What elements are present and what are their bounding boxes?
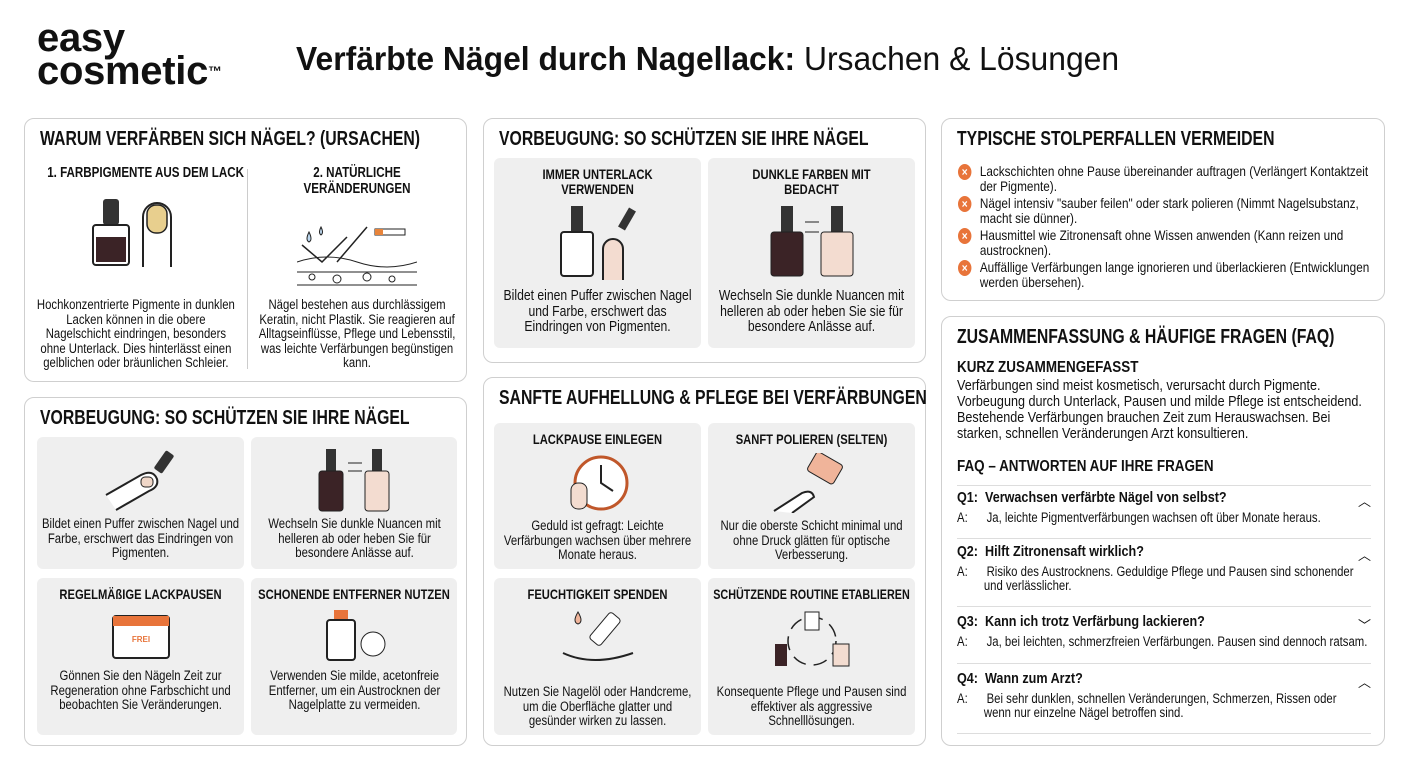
card: polish: SANFT POLIEREN (SELTEN) <box>736 431 887 447</box>
card: base coat: IMMER UNTERLACK <box>542 166 653 182</box>
panel: summary & FAQ: ZUSAMMENFASSUNG & HÄUFIGE FRAGEN (FAQ) <box>957 326 1334 348</box>
card: base coat: Bildet einen Puffer zwischen Nagel und Farbe, erschwert das Eindringen von Pigmenten. <box>504 288 692 335</box>
card: polish: Nur die oberste Schicht minimal und ohne Druck glätten für optische Verbesserung. <box>720 518 903 562</box>
card: routine: SCHÜTZENDE ROUTINE ETABLIEREN <box>713 587 910 602</box>
card: remover: SCHONENDE ENTFERNER NUTZEN <box>258 586 450 602</box>
card: base coat: VERWENDEN <box>561 181 634 197</box>
FAQ list: ︿ <box>1358 548 1371 563</box>
Q2: A: Risiko des Austrocknens. Geduldige Pflege und Pausen sind schonender und verlässlicher. <box>957 564 1354 593</box>
card: dark colours: DUNKLE FARBEN MIT <box>752 166 871 182</box>
FAQ list: ︿ <box>1358 494 1371 509</box>
card: moisture <box>494 578 701 735</box>
card: dark colours: Wechseln Sie dunkle Nuancen mit helleren ab oder heben Sie sie für besondere Anlässe auf. <box>719 288 904 335</box>
card: base coat <box>494 158 701 348</box>
panel: pitfalls: TYPISCHE STOLPERFALLEN VERMEIDEN <box>957 128 1275 150</box>
list: pitfalls: Lackschichten ohne Pause übereinander auftragen (Verlängert Kontaktzeit der Pigmente). <box>980 163 1368 194</box>
card: dark colours: BEDACHT <box>784 181 839 197</box>
card: dark colours: Wechseln Sie dunkle Nuancen mit helleren ab oder heben Sie für besondere Anlässe auf. <box>268 516 441 560</box>
icon: cream and hand <box>562 611 634 661</box>
panel: prevention left: VORBEUGUNG: SO SCHÜTZEN SIE IHRE NÄGEL <box>40 407 410 429</box>
icon: clear bottle <box>560 206 636 280</box>
FAQ list: ︿ <box>1358 675 1371 690</box>
card: pauses: Gönnen Sie den Nägeln Zeit zur Regeneration ohne Farbschicht und beobachten Sie Veränderungen. <box>50 668 231 712</box>
list: pitfalls: × <box>962 165 968 179</box>
icon: keratin layers <box>297 226 417 286</box>
Q4: A: Bei sehr dunklen, schnellen Veränderungen, Schmerzen, Rissen oder wenn nur einzelne Nägel betroffen sind. <box>957 690 1336 720</box>
logo <box>37 16 222 93</box>
list: pitfalls: × <box>962 261 968 275</box>
list: pitfalls <box>958 163 1369 290</box>
card: polish <box>708 423 915 569</box>
Q3 <box>957 613 1367 649</box>
card: moisture: Nutzen Sie Nagelöl oder Handcreme, um die Oberfläche glatter und gesünder wirken zu lassen. <box>504 684 691 728</box>
logo: easy <box>37 16 125 60</box>
card: routine: Konsequente Pflege und Pausen sind effektiver als aggressive Schnelllösungen. <box>717 684 906 728</box>
panel: causes <box>24 118 467 382</box>
panel: gentle care: SANFTE AUFHELLUNG & PFLEGE BEI VERFÄRBUNGEN <box>499 387 927 409</box>
card: moisture: FEUCHTIGKEIT SPENDEN <box>527 586 668 602</box>
panel: causes: WARUM VERFÄRBEN SICH NÄGEL? (URSACHEN) <box>40 128 420 150</box>
cause 1: Hochkonzentrierte Pigmente in dunklen Lacken können in die obere Nagelschicht eindringen, besonders ohne Unterlack. Dies hinterlässt einen gelblichen oder bräunlichen Schleier. <box>37 297 235 370</box>
card: pause: LACKPAUSE EINLEGEN <box>533 431 662 447</box>
FAQ list: ﹀ <box>1358 618 1371 633</box>
card: dark colours <box>708 158 915 348</box>
Q1 <box>957 489 1321 525</box>
card: base coat: Bildet einen Puffer zwischen Nagel und Farbe, erschwert das Eindringen von Pigmenten. <box>42 516 239 560</box>
icon: calendar <box>112 615 170 659</box>
card: pause <box>494 423 701 569</box>
panel: gentle care <box>483 377 926 746</box>
Q2 <box>957 543 1354 593</box>
cause 1: 1. FARBPIGMENTE AUS DEM LACK <box>47 165 244 181</box>
panel: prevention left <box>24 397 467 746</box>
FAQ list <box>957 489 1371 720</box>
card: remover <box>251 578 457 735</box>
icon: clock <box>570 456 628 510</box>
icon: finger brush <box>106 450 174 511</box>
panel: prevention middle: VORBEUGUNG: SO SCHÜTZEN SIE IHRE NÄGEL <box>499 128 869 150</box>
card: pause: Geduld ist gefragt: Leichte Verfärbungen wachsen über mehrere Monate heraus. <box>504 518 691 562</box>
list: pitfalls: × <box>962 229 968 243</box>
Q2: Q2: Hilft Zitronensaft wirklich? <box>957 543 1144 560</box>
Q3: Q3: Kann ich trotz Verfärbung lackieren? <box>957 613 1205 630</box>
Q1: A: Ja, leichte Pigmentverfärbungen wachsen oft über Monate heraus. <box>957 510 1321 524</box>
icon: two bottles <box>318 449 390 512</box>
list: pitfalls: Hausmittel wie Zitronensaft ohne Wissen anwenden (Kann reizen und austrocknen). <box>980 227 1343 258</box>
icon: two bottles <box>770 206 854 276</box>
Q4 <box>957 670 1336 720</box>
card: remover: Verwenden Sie milde, acetonfreie Entferner, um ein Austrocknen der Nagelplatte zu vermeiden. <box>269 668 440 712</box>
icon: nail polish and nail <box>92 199 172 267</box>
panel: summary & FAQ <box>941 316 1385 746</box>
summary: Verfärbungen sind meist kosmetisch, verursacht durch Pigmente. Vorbeugung durch Unterlack, Pausen und milde Pflege ist entscheidend. Bestehende Verfärbungen brauchen Zeit zum Herauswachsen. Bei starken, schnellen Veränderungen Arzt konsultieren. <box>957 377 1362 442</box>
cause 2: Nägel bestehen aus durchlässigem Keratin, nicht Plastik. Sie reagieren auf Alltagseinflüsse, Pflege und Lebensstil, was leichte Verfärbungen begünstigen kann. <box>259 297 455 370</box>
icon: remover bottle <box>326 610 386 661</box>
logo: cosmetic™ <box>37 49 222 93</box>
list: pitfalls: Nägel intensiv "sauber feilen" oder stark polieren (Nimmt Nagelsubstanz, macht sie dünner). <box>980 195 1359 226</box>
summary: KURZ ZUSAMMENGEFASST <box>957 359 1138 376</box>
Q4: Q4: Wann zum Arzt? <box>957 670 1083 687</box>
icon: routine cycle <box>775 612 850 666</box>
card: base coat <box>37 437 244 569</box>
icon: buffer <box>774 453 843 513</box>
FAQ heading: FAQ – ANTWORTEN AUF IHRE FRAGEN <box>957 458 1214 475</box>
panel: pitfalls <box>941 118 1385 301</box>
Q1: Q1: Verwachsen verfärbte Nägel von selbst? <box>957 489 1227 506</box>
card: pauses: REGELMÄßIGE LACKPAUSEN <box>59 586 222 602</box>
cause 2: 2. NATÜRLICHE <box>313 165 401 181</box>
cause 1 <box>37 165 244 370</box>
list: pitfalls: × <box>962 197 968 211</box>
title: Verfärbte Nägel durch Nagellack: Ursachen & Lösungen <box>296 40 1119 77</box>
card: dark colours <box>251 437 457 569</box>
card: pauses <box>37 578 244 735</box>
panel: prevention middle <box>483 118 926 363</box>
icon: calendar: FREI <box>131 635 150 644</box>
Q3: A: Ja, bei leichten, schmerzfreien Verfärbungen. Pausen sind dennoch ratsam. <box>957 634 1367 648</box>
cause 2: VERÄNDERUNGEN <box>304 181 410 197</box>
card: routine <box>708 578 915 735</box>
list: pitfalls: Auffällige Verfärbungen lange ignorieren und überlackieren (Entwicklungen werden übersehen). <box>980 259 1369 290</box>
cause 2 <box>258 164 455 370</box>
